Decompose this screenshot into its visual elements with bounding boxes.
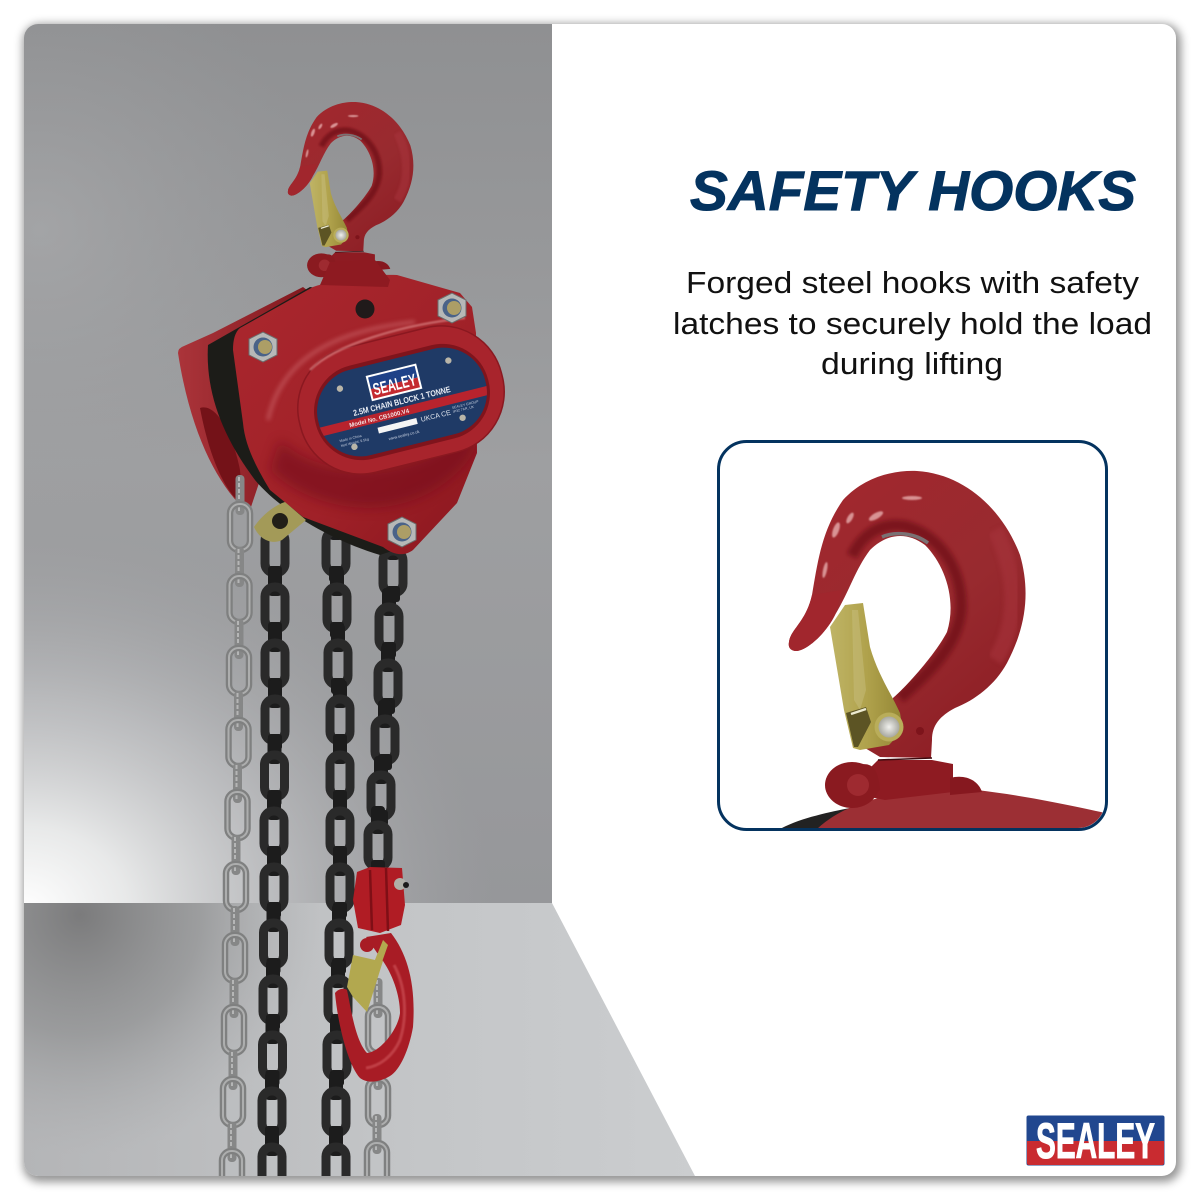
detail panel: hook close-up: [718, 442, 1106, 830]
black load chain one: [262, 512, 285, 1198]
chain guide bracket: [254, 502, 306, 542]
top hook with safety latch: [288, 102, 413, 277]
heading: SAFETY HOOKS: [690, 159, 1136, 222]
left silver hand chain: [222, 475, 250, 1197]
lower red hook: [335, 933, 414, 1082]
nameplate logo: [366, 363, 422, 401]
description text: Forged steel hooks with safety: [686, 265, 1140, 300]
nameplate: UKCA CE: [420, 410, 452, 424]
hook swivel lug: [320, 260, 390, 287]
black cap: [356, 300, 374, 318]
product photo background: [24, 24, 695, 1176]
nameplate: Nett Weight: 9.5kg: [340, 437, 369, 448]
chain block housing: [178, 275, 517, 555]
black chain case: [208, 287, 410, 555]
nameplate logo: SEALEY: [371, 370, 419, 399]
nameplate: Made in China: [339, 434, 362, 443]
bolt right: [438, 293, 466, 323]
nameplate: www.sealey.co.uk: [388, 429, 420, 441]
bolt left: [249, 332, 277, 362]
nameplate: SEALEY GROUP: [451, 399, 480, 410]
nameplate: IP32 7AR, UK: [452, 405, 475, 414]
lower hook block: [353, 867, 409, 933]
housing dome shading: [268, 322, 477, 508]
back plate cut-out: [200, 407, 243, 505]
nameplate: Model No. CB1000.V4: [349, 408, 411, 429]
bolt bottom: [388, 517, 416, 547]
close-up hook: [780, 471, 1105, 829]
nameplate: 2.5M CHAIN BLOCK 1 TONNE: [352, 384, 452, 418]
back plate: [178, 287, 320, 510]
description text: during lifting: [821, 346, 1003, 381]
right silver hand chain: [367, 978, 388, 1189]
black load chain three: [368, 532, 403, 876]
description text: [673, 265, 1152, 381]
description text: latches to securely hold the load: [673, 306, 1152, 341]
front plate: [233, 275, 477, 554]
black load chain two: [326, 512, 350, 1198]
nameplate: [317, 348, 487, 456]
lower hook latch: [347, 940, 388, 1012]
label rim: [285, 313, 517, 487]
